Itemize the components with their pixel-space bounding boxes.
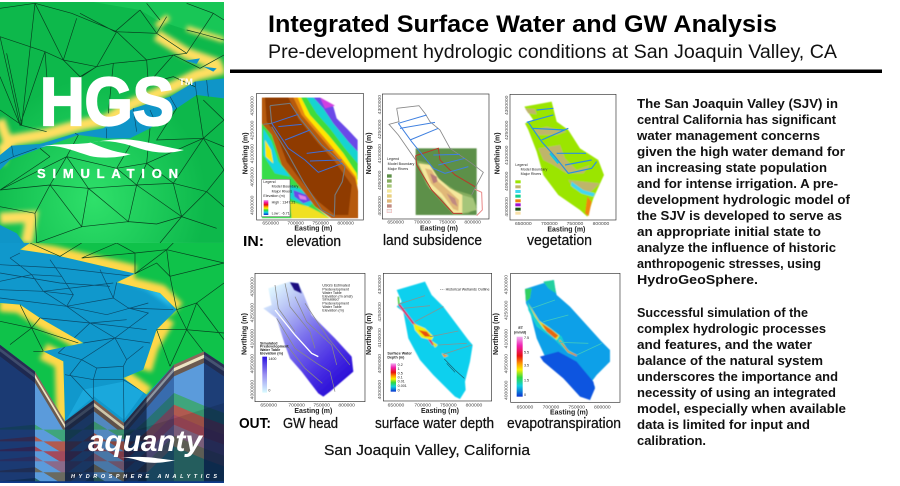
color scale legend: (mm/d) bbox=[514, 330, 527, 334]
rivers bbox=[527, 108, 597, 173]
color scale legend: 0 bbox=[398, 389, 400, 393]
water table contours bbox=[275, 283, 350, 392]
color scale legend: 0 bbox=[268, 389, 270, 393]
text block: second paragraph: data is limited for input and bbox=[637, 417, 810, 432]
text block: first paragraph: an appropriate initial state to bbox=[637, 224, 821, 239]
text block: second paragraph: complex hydrologic processes bbox=[637, 321, 826, 336]
color scale legend: 1400 bbox=[268, 357, 276, 361]
axis labels: 4100000 bbox=[249, 329, 255, 348]
text block: second paragraph: Successful simulation of the bbox=[637, 305, 808, 320]
legend: Elevation (m) bbox=[263, 194, 285, 198]
axis labels: 4300000 bbox=[249, 277, 255, 297]
color scale legend: 0.5 bbox=[398, 372, 403, 376]
text block: second paragraph: necessity of using an integrated bbox=[637, 385, 836, 400]
color scale legend bbox=[260, 341, 289, 393]
caption: GW head: GW head bbox=[283, 416, 338, 432]
text block: second paragraph: and features, and the water bbox=[637, 337, 812, 352]
axis labels: 700000 bbox=[543, 404, 560, 410]
axis labels: 750000 bbox=[313, 403, 330, 409]
axis labels: 700000 bbox=[414, 403, 431, 409]
legend: Legend bbox=[263, 180, 276, 184]
basin boundary and rivers bbox=[263, 103, 345, 217]
axis labels: 800000 bbox=[594, 404, 611, 410]
axis labels: 4100000 bbox=[504, 145, 510, 165]
axis labels: 800000 bbox=[593, 221, 610, 227]
legend bbox=[262, 179, 298, 217]
axis labels: 4300000 bbox=[377, 95, 383, 114]
axis labels: 700000 bbox=[287, 220, 304, 226]
caption: surface water depth: surface water depth bbox=[375, 416, 494, 432]
axis labels: 4250000 bbox=[503, 300, 509, 320]
chart: input land subsidence map bbox=[366, 94, 489, 233]
subtitle: Pre-development hydrologic conditions at San Joaquin Valley, CA bbox=[268, 42, 837, 63]
axis labels: 4250000 bbox=[377, 119, 383, 139]
axis labels: 4050000 bbox=[250, 167, 256, 187]
axis labels: 750000 bbox=[439, 220, 456, 226]
legend: Low : -6.71 bbox=[272, 211, 290, 215]
text block: second paragraph: model, especially when available bbox=[637, 401, 846, 416]
top legend: Elevation (m) bbox=[322, 309, 344, 313]
axis labels: 4000000 bbox=[250, 195, 256, 215]
color scale legend: Simulated bbox=[260, 341, 277, 345]
head raster bbox=[263, 282, 353, 397]
color scale legend: 0 bbox=[524, 393, 526, 397]
axis labels: Easting (m) bbox=[294, 408, 332, 415]
elevation raster bbox=[262, 97, 358, 218]
legend: Major Rivers bbox=[272, 189, 292, 193]
icon: aquanty swoosh bbox=[118, 457, 175, 463]
color scale legend: ET bbox=[518, 326, 524, 330]
text block: second paragraph: balance of the natural system bbox=[637, 353, 823, 368]
trademark mark: TM bbox=[179, 77, 193, 87]
icon: HGS wave swoosh bbox=[38, 139, 184, 158]
legend: Model Boundary bbox=[521, 168, 547, 172]
legend: High : 1347.21 bbox=[272, 200, 295, 204]
axis labels: 700000 bbox=[414, 220, 431, 226]
caption: elevation: elevation bbox=[286, 234, 341, 250]
color scale legend: Depth (m) bbox=[387, 355, 405, 359]
color scale legend: 0.001 bbox=[398, 384, 407, 388]
text block: first paragraph: water management concerns bbox=[636, 128, 820, 143]
cover artwork: lower water and strata block bbox=[0, 243, 224, 486]
color scale legend: 0.01 bbox=[398, 380, 405, 384]
text block: first paragraph: analyze the influence of historic bbox=[637, 240, 836, 255]
axis labels: Easting (m) bbox=[294, 226, 332, 233]
top legend: Water Table bbox=[322, 305, 342, 309]
row label: OUT: OUT: bbox=[239, 415, 271, 432]
axis labels: 4100000 bbox=[377, 328, 383, 348]
axis labels: 650000 bbox=[388, 403, 405, 409]
axis labels: 800000 bbox=[466, 403, 483, 409]
figure caption: San Joaquin Valley, California bbox=[324, 443, 531, 459]
axis labels: 750000 bbox=[567, 221, 584, 227]
color scale legend bbox=[514, 326, 529, 397]
axis labels: 650000 bbox=[515, 221, 532, 227]
axis labels: 650000 bbox=[387, 220, 404, 226]
axis labels: 750000 bbox=[568, 404, 585, 410]
axis labels: Northing (m) bbox=[243, 132, 250, 174]
vegetation raster bbox=[524, 102, 604, 217]
text block: second paragraph: calibration. bbox=[637, 433, 706, 448]
top legend: USGS Estimated bbox=[322, 284, 350, 288]
axis labels: 4050000 bbox=[249, 354, 255, 373]
axis labels: 4250000 bbox=[250, 120, 256, 140]
axis labels: 650000 bbox=[260, 403, 277, 409]
color scale legend: 0.2 bbox=[398, 363, 403, 367]
legend bbox=[515, 163, 547, 215]
axis labels: 4050000 bbox=[377, 170, 383, 190]
color scale legend: 1 bbox=[398, 367, 400, 371]
axis labels: Easting (m) bbox=[421, 408, 459, 415]
color scale legend: Water Table bbox=[260, 348, 280, 352]
top legend: Water Table bbox=[322, 291, 342, 295]
axis labels: 700000 bbox=[288, 403, 305, 409]
axis labels: 750000 bbox=[312, 220, 329, 226]
axis labels: 4100000 bbox=[250, 144, 256, 163]
chart: output surface water depth map bbox=[366, 273, 492, 415]
chart: input elevation map bbox=[243, 93, 363, 233]
legend: Model Boundary bbox=[272, 185, 298, 189]
row label: IN: IN: bbox=[243, 233, 264, 250]
axis labels: 4300000 bbox=[377, 275, 383, 294]
axis labels: Northing (m) bbox=[494, 132, 501, 174]
legend: Legend bbox=[515, 163, 528, 167]
top legend: Simulated bbox=[322, 298, 339, 302]
text block: first paragraph: and for intense irrigation. A pre- bbox=[637, 176, 838, 191]
text block: first paragraph: development hydrologic model of bbox=[637, 192, 851, 207]
axis labels: Northing (m) bbox=[366, 132, 373, 174]
text block: first paragraph: central California has significant bbox=[637, 112, 837, 127]
header rule bbox=[230, 70, 882, 73]
top legend bbox=[322, 284, 353, 313]
axis labels: 4250000 bbox=[249, 303, 255, 322]
top legend: Elevation (m amsl) bbox=[322, 295, 353, 299]
axis labels bbox=[366, 275, 483, 415]
text block: first paragraph: HydroGeoSphere. bbox=[637, 272, 758, 287]
axis labels: 4000000 bbox=[503, 380, 509, 400]
axis labels: Northing (m) bbox=[493, 313, 500, 355]
axis labels: 4300000 bbox=[504, 95, 510, 115]
axis labels: 4100000 bbox=[377, 144, 383, 163]
axis labels: Northing (m) bbox=[241, 313, 248, 355]
ET raster bbox=[525, 280, 610, 400]
HGS logo wordmark: HGS bbox=[40, 64, 174, 140]
aquanty logo wordmark: aquanty bbox=[88, 425, 203, 458]
axis labels bbox=[493, 275, 611, 416]
axis labels: 650000 bbox=[517, 404, 534, 410]
axis labels: 800000 bbox=[464, 220, 481, 226]
legend: Legend bbox=[387, 157, 399, 161]
caption: evapotranspiration: evapotranspiration bbox=[507, 416, 621, 432]
axis labels bbox=[241, 277, 355, 415]
axis labels: 4100000 bbox=[503, 329, 509, 348]
subsidence raster bbox=[416, 148, 477, 215]
top legend: Predevelopment bbox=[322, 301, 349, 305]
color scale legend: Surface Water bbox=[387, 351, 412, 355]
color scale legend: Predevelopment bbox=[260, 345, 289, 349]
panel: HGS Simulation cover bbox=[0, 2, 224, 486]
axis labels: 4250000 bbox=[377, 302, 383, 322]
axis labels: 800000 bbox=[338, 403, 355, 409]
legend: Major Rivers bbox=[521, 172, 541, 176]
cover artwork: top mesh terrain bbox=[0, 2, 224, 243]
color scale legend: 1.5 bbox=[524, 379, 529, 383]
axis labels bbox=[243, 96, 354, 233]
chart: output GW head map bbox=[241, 273, 365, 415]
axis labels: 4300000 bbox=[250, 96, 256, 116]
color scale legend bbox=[387, 351, 412, 393]
axis labels: Northing (m) bbox=[366, 313, 373, 355]
top legend: Historical Wetlands Outline bbox=[446, 288, 489, 292]
text block: first paragraph: an increasing state population bbox=[637, 160, 827, 175]
axis labels: 800000 bbox=[337, 220, 354, 226]
title: Integrated Surface Water and GW Analysis bbox=[268, 11, 777, 38]
axis labels: 650000 bbox=[262, 220, 279, 226]
axis labels: 4050000 bbox=[377, 354, 383, 373]
color scale legend: 5.5 bbox=[524, 350, 529, 354]
river traces bbox=[532, 300, 602, 355]
caption: land subsidence: land subsidence bbox=[383, 233, 482, 249]
axis labels: 4050000 bbox=[503, 354, 509, 373]
axis labels: 4050000 bbox=[504, 171, 510, 191]
color scale legend: 7.5 bbox=[524, 336, 529, 340]
axis labels: 4000000 bbox=[504, 197, 510, 217]
depth raster bbox=[397, 282, 473, 399]
aquifer outline and rivers bbox=[416, 148, 475, 213]
top legend: Predevelopment bbox=[322, 287, 349, 291]
color scale legend: 3.5 bbox=[524, 364, 529, 368]
legend: Model Boundary bbox=[388, 162, 414, 166]
axis labels: 4000000 bbox=[249, 380, 255, 399]
text block: first paragraph: given the high water demand for bbox=[637, 144, 845, 159]
legend bbox=[387, 157, 414, 213]
axis labels: 4250000 bbox=[504, 120, 510, 140]
axis labels: Easting (m) bbox=[547, 227, 585, 234]
wetlands and river outlines bbox=[398, 296, 472, 354]
text block: first paragraph bbox=[636, 96, 851, 287]
text block: first paragraph: anthropogenic stresses, using bbox=[637, 256, 821, 271]
axis labels: 4000000 bbox=[377, 380, 383, 399]
color scale legend: Elevation (m) bbox=[260, 351, 284, 355]
text block: second paragraph bbox=[637, 305, 846, 448]
text block: second paragraph: underscores the importance and bbox=[637, 369, 838, 384]
caption: vegetation: vegetation bbox=[527, 233, 592, 249]
axis labels: 4300000 bbox=[503, 275, 509, 294]
chart: input vegetation map bbox=[494, 94, 616, 234]
text block: first paragraph: the SJV is developed to serve as bbox=[637, 208, 842, 223]
axis labels: 4000000 bbox=[377, 196, 383, 216]
axis labels: Easting (m) bbox=[550, 409, 588, 416]
axis labels: Easting (m) bbox=[420, 226, 458, 233]
axis labels bbox=[366, 95, 481, 233]
legend: Major Rivers bbox=[388, 167, 408, 171]
axis labels: 750000 bbox=[440, 403, 457, 409]
chart: output evapotranspiration map bbox=[493, 273, 620, 416]
axis labels bbox=[494, 95, 610, 234]
color scale legend: 0.1 bbox=[398, 376, 403, 380]
text block: first paragraph: The San Joaquin Valley (SJV) in bbox=[637, 96, 838, 111]
aquanty tagline: HYDROSPHERE ANALYTICS bbox=[71, 474, 217, 480]
axis labels: 700000 bbox=[541, 221, 558, 227]
SIMULATION subtitle: SIMULATION bbox=[37, 166, 178, 181]
